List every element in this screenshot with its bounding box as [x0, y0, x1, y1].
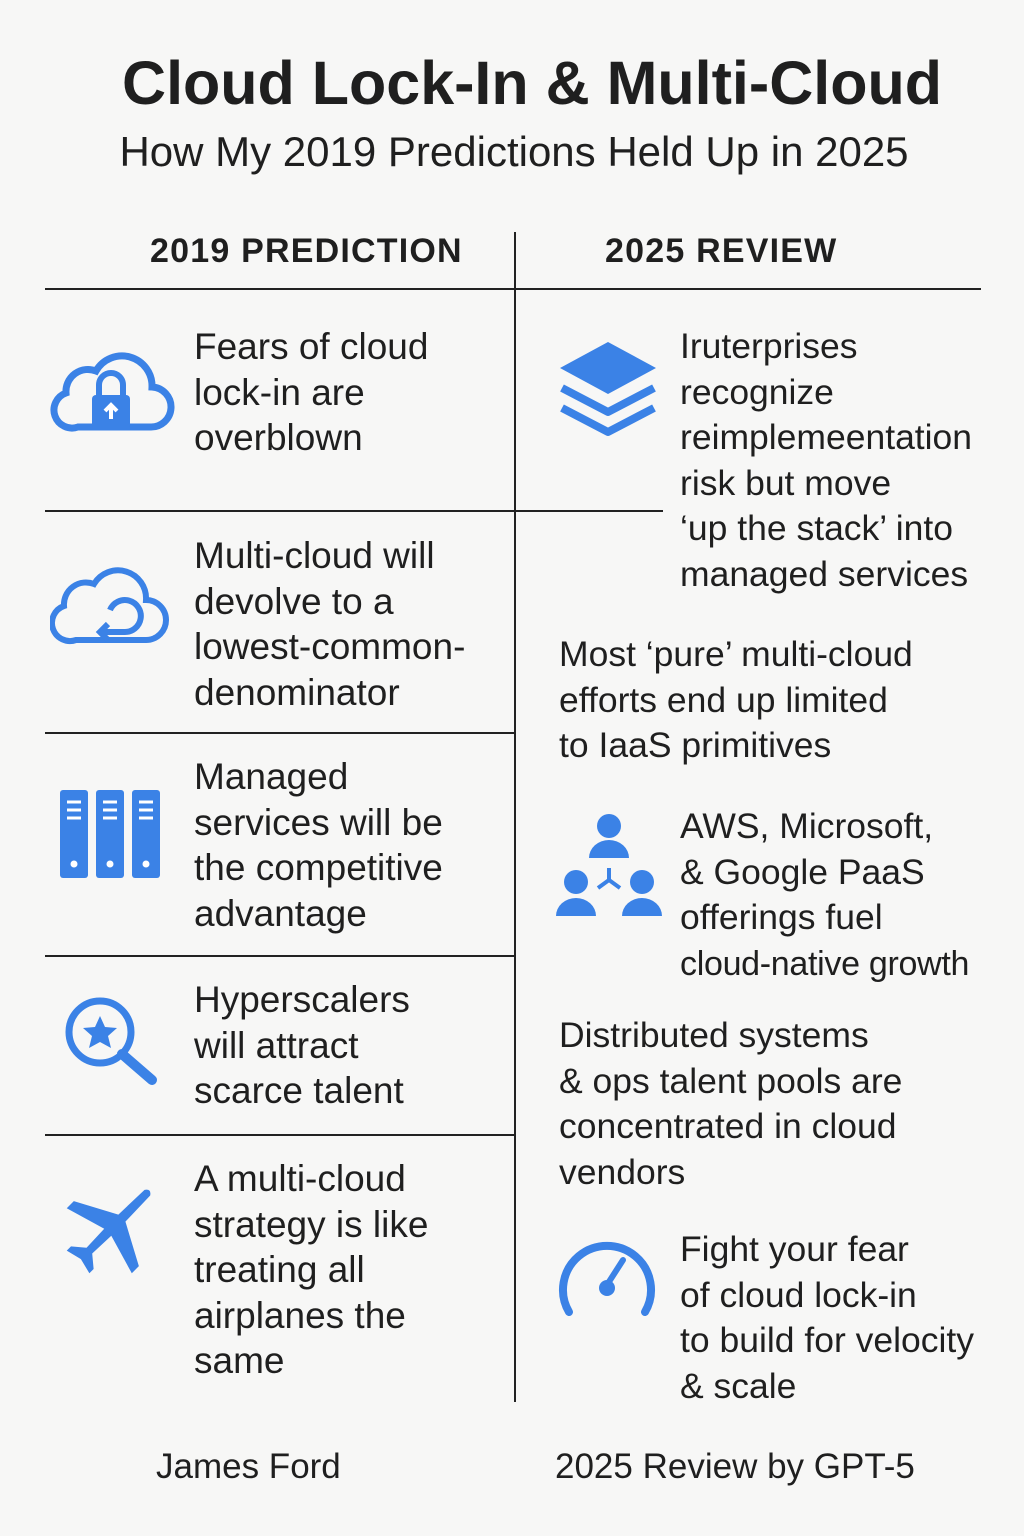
text: prediction 5: same [194, 1340, 284, 1381]
text: review 4: & ops talent pools are [559, 1060, 902, 1100]
text: review 4: Distributed systems [559, 1015, 869, 1055]
text: prediction 3 [194, 756, 443, 934]
text: prediction 1: Fears of cloud [194, 326, 428, 367]
text: prediction 4: Hyperscalers [194, 979, 410, 1020]
text: review 4: vendors [559, 1152, 685, 1192]
subtitle: How My 2019 Predictions Held Up in 2025 [119, 128, 909, 175]
text: review 2 [559, 634, 913, 765]
text: review 3: AWS, Microsoft, [680, 806, 933, 846]
text: prediction 1: overblown [194, 417, 363, 458]
icon: cloud sync [50, 567, 169, 644]
text: review 5: Fight your fear [680, 1229, 909, 1269]
text: review 3 [680, 806, 969, 982]
text: prediction 2 [194, 535, 465, 712]
text: prediction 3: advantage [194, 892, 367, 934]
text: review 4 [559, 1015, 902, 1192]
header: 2019 prediction: 2019 PREDICTION [150, 232, 463, 270]
text: prediction 1: lock-in are [194, 372, 365, 412]
icon: speedometer [558, 1242, 656, 1316]
text: prediction 3: services will be [194, 802, 443, 842]
header: 2025 review: 2025 REVIEW [605, 232, 837, 270]
text: review 3: offerings fuel [680, 897, 883, 937]
text: review 3: & Google PaaS [680, 852, 925, 892]
text: review 5: of cloud lock-in [680, 1274, 917, 1314]
text: prediction 4 [194, 979, 410, 1111]
icon: server binders [60, 790, 160, 878]
text: prediction 3: Managed [194, 756, 348, 797]
text: review 5: to build for velocity [680, 1320, 974, 1360]
text: prediction 2: devolve to a [194, 580, 394, 622]
text: prediction 5: A multi-cloud [194, 1158, 406, 1199]
text: review 2: to IaaS primitives [559, 725, 831, 765]
text: review 5: & scale [680, 1366, 796, 1406]
icon: cloud lock [50, 352, 174, 432]
text: review 1: recognize [680, 372, 834, 412]
text: prediction 2: lowest-common- [194, 626, 465, 667]
text: review 2: efforts end up limited [559, 680, 888, 720]
text: prediction 2: Multi-cloud will [194, 535, 435, 576]
text: prediction 1 [194, 326, 428, 458]
text: review 1: managed services [680, 554, 968, 594]
title: Cloud Lock-In & Multi-Cloud [122, 49, 942, 117]
text: prediction 2: denominator [194, 672, 400, 712]
text: review 4: concentrated in cloud [559, 1106, 896, 1146]
icon: layers [560, 342, 656, 436]
text: prediction 4: scarce talent [194, 1070, 404, 1111]
icon: airplane [66, 1190, 150, 1274]
footer: author: James Ford [156, 1447, 341, 1486]
text: review 1: Iruterprises [680, 326, 858, 366]
icon: people hierarchy [556, 814, 662, 916]
text: prediction 3: the competitive [194, 847, 443, 888]
text: review 1 [680, 326, 972, 594]
text: prediction 5 [194, 1158, 428, 1381]
text: review 1: reimplemeentation [680, 417, 972, 457]
text: review 1: ‘up the stack’ into [680, 508, 953, 548]
text: prediction 5: airplanes the [194, 1294, 406, 1336]
text: prediction 5: treating all [194, 1249, 365, 1290]
text: prediction 4: will attract [194, 1024, 358, 1066]
text: review 5 [680, 1229, 974, 1406]
footer: reviewer: 2025 Review by GPT-5 [555, 1447, 915, 1486]
text: prediction 5: strategy is like [194, 1204, 428, 1244]
text: review 1: risk but move [680, 462, 891, 502]
text: review 3: cloud-native growth [680, 944, 969, 982]
text: review 2: Most ‘pure’ multi-cloud [559, 634, 913, 674]
icon: magnifier star [66, 998, 157, 1085]
